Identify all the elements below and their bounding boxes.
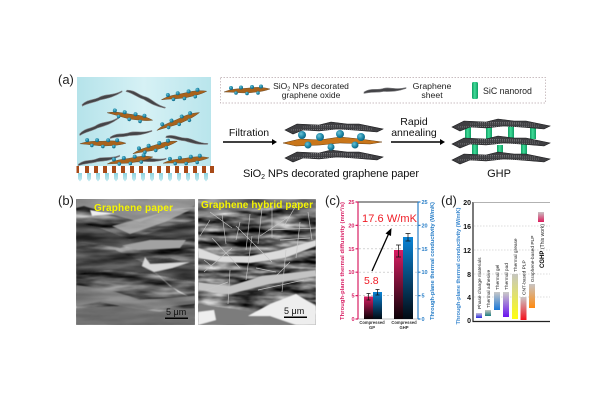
right axis: thermal conductivity: 20 [422, 223, 428, 229]
bar chart: thermal conductivity comparison [456, 200, 550, 325]
scale bar: right SEM: 5 μm [284, 306, 304, 316]
caption: decorated graphene paper: NPs decorated graphene paper [265, 168, 419, 180]
caption: GHP: GHP [487, 168, 511, 180]
arrow: rapid annealing [391, 116, 445, 145]
caption: decorated graphene paper: SiO [243, 168, 262, 180]
legend text: SiC nanorod: SiC nanorod [483, 86, 532, 96]
left axis: thermal diffusivity: 20 [348, 223, 354, 229]
left axis: thermal diffusivity: Through-plane thermal diffusivity (mm²/s) [339, 202, 346, 320]
bar labels: Thermal adhesive [486, 270, 492, 308]
arrow: rapid annealing: annealing [391, 127, 437, 139]
y tick labels: 4 [467, 295, 471, 302]
decorated graphene oxide in solution [80, 87, 209, 167]
bar labels: Thermal pad [504, 263, 510, 290]
panel label: (d): (d) [441, 193, 457, 208]
right axis: thermal conductivity: Through-plane thermal conductivity (W/mK) [430, 202, 436, 320]
bars [364, 237, 413, 319]
left axis: thermal diffusivity: 15 [348, 247, 354, 253]
bar chart: diffusivity and conductivity [339, 200, 436, 330]
legend icon: graphene sheet [364, 88, 406, 94]
legend text: graphene sheet: Graphene [413, 81, 451, 91]
right axis: thermal conductivity [418, 200, 436, 323]
left axis: thermal diffusivity: 5 [351, 294, 354, 300]
left axis: thermal diffusivity: 0 [351, 317, 354, 323]
SEM label: graphene hybrid paper: Graphene hybrid paper [201, 200, 313, 211]
grid lines [474, 226, 550, 297]
arrow: increase [372, 228, 392, 271]
arrow: filtration [223, 127, 277, 145]
x labels: GP [369, 325, 375, 330]
y axis title: Through-plane thermal conductivity (W/mK) [456, 207, 462, 324]
bar labels: Graphene-based PLP [530, 236, 536, 282]
error bars [366, 234, 410, 300]
schematic: decorated graphene paper [283, 122, 383, 162]
legend text: decorated graphene oxide: 2 [287, 86, 290, 92]
legend icon: decorated graphene oxide [224, 84, 270, 95]
filter membrane [76, 166, 214, 173]
left axis: thermal diffusivity [339, 200, 358, 323]
graphene sheets in solution [78, 86, 208, 166]
y tick labels: 16 [463, 224, 471, 231]
right axis: thermal conductivity: 0 [422, 317, 425, 323]
x labels: Compressed [359, 320, 385, 325]
callout: 5.8: 5.8 [364, 275, 379, 287]
bar labels: CNT-based PLP [522, 260, 528, 295]
legend text: decorated graphene oxide: SiO [273, 81, 349, 92]
arrow: rapid annealing: Rapid [400, 116, 428, 128]
bar labels: Thermal gel [495, 265, 501, 290]
caption: decorated graphene paper: 2 [261, 174, 265, 181]
y tick labels: 12 [463, 248, 471, 255]
grid lines [359, 225, 417, 296]
y tick labels: 0 [467, 318, 471, 325]
solution background [77, 77, 211, 166]
legend text: decorated graphene oxide: NPs decorated [290, 81, 349, 91]
legend text: graphene sheet: sheet [421, 90, 443, 100]
x labels: Compressed [391, 320, 417, 325]
y tick labels: 20 [463, 200, 471, 207]
right axis: thermal conductivity: 5 [422, 294, 425, 300]
panel label: (a): (a) [58, 72, 74, 87]
x labels: GHP [399, 325, 409, 330]
arrow: filtration: Filtration [229, 127, 269, 139]
bar labels: CGHP (This work) [540, 224, 546, 268]
left axis: thermal diffusivity: 10 [348, 270, 354, 276]
legend box [220, 78, 546, 103]
bar labels: Phase change materials [477, 257, 483, 309]
right axis: thermal conductivity: 15 [422, 247, 428, 253]
bar labels: Thermal grease [513, 238, 519, 272]
right axis: thermal conductivity: 25 [422, 200, 428, 206]
right axis: thermal conductivity: 10 [422, 270, 428, 276]
callout: 17.6 W/mK: 17.6 W/mK [362, 213, 418, 225]
scale bar: left SEM: 5 μm [166, 307, 186, 317]
legend text: decorated graphene oxide: graphene oxide [282, 90, 341, 100]
y tick labels: 8 [467, 272, 471, 279]
SEM image: graphene paper [76, 199, 195, 325]
schematic: GHP [452, 119, 550, 164]
SEM image: graphene hybrid paper [198, 199, 316, 325]
bars [476, 212, 544, 320]
filtrate droplets [78, 173, 208, 182]
panel: filtration tank [76, 77, 214, 182]
left axis: thermal diffusivity: 25 [348, 200, 354, 206]
panel label: (c): (c) [325, 193, 340, 208]
axes [473, 202, 550, 322]
SEM label: graphene paper: Graphene paper [94, 203, 173, 214]
bar labels [477, 224, 546, 309]
panel label: (b): (b) [58, 193, 74, 208]
legend icon: SiC nanorod [472, 82, 478, 99]
